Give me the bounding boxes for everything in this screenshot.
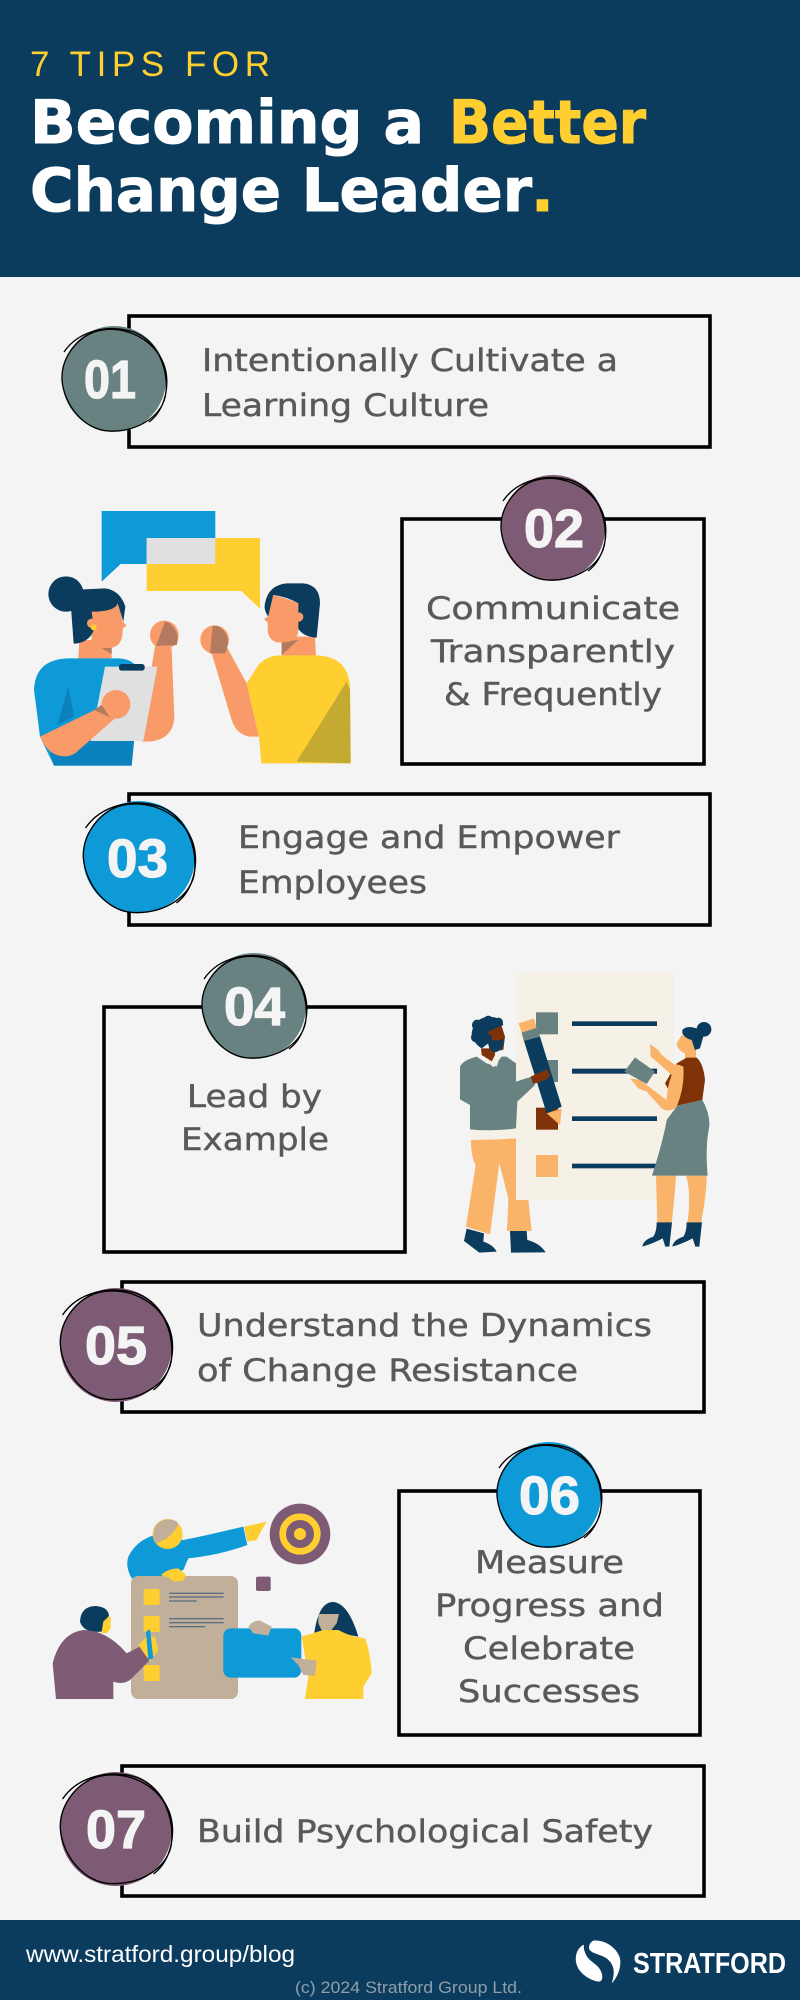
- tip 5 text: [197, 1308, 652, 1389]
- man with pencil: [460, 1016, 562, 1253]
- tip 4 text: Example: [181, 1122, 329, 1158]
- panel: tip 5: [60, 1282, 704, 1412]
- tip 1 text: Learning Culture: [202, 388, 489, 424]
- illustration: team with checklist and target: [53, 1504, 372, 1699]
- tip 3 text: [238, 820, 620, 901]
- tip 1 text: Intentionally Cultivate a: [202, 343, 618, 379]
- tip 2 text: Transparently: [430, 634, 675, 670]
- man pointing over board: [127, 1519, 267, 1578]
- man in yellow shirt: [200, 583, 351, 763]
- badge 07: [60, 1772, 173, 1886]
- panel: tip 4: [104, 953, 405, 1252]
- blog url: www.stratford.group/blog: [25, 1941, 295, 1967]
- tip 1 text: [202, 343, 618, 424]
- badge 04: [202, 953, 307, 1059]
- tip 6 text: Measure: [475, 1545, 624, 1581]
- tip 2 text: Communicate: [426, 591, 680, 627]
- tip 6 text: Progress and: [435, 1588, 664, 1624]
- badge 02: 02: [524, 499, 584, 559]
- woman with book: [624, 1022, 711, 1247]
- tip 6 text: [435, 1545, 664, 1710]
- title: [30, 88, 646, 226]
- panel: tip 6: [399, 1442, 700, 1735]
- badge 07: 07: [86, 1800, 146, 1860]
- panel: tip 1: [62, 316, 710, 447]
- illustration: checklist with two people: [460, 972, 711, 1253]
- badge 06: [497, 1442, 602, 1548]
- tip 4 text: [181, 1079, 329, 1158]
- tip 6 text: Successes: [458, 1674, 640, 1710]
- icon: Stratford logo mark: [576, 1941, 620, 1983]
- badge 04: 04: [224, 977, 285, 1037]
- checklist paper: [516, 972, 674, 1200]
- panel: tip 3: [83, 794, 710, 925]
- checklist board: [131, 1568, 238, 1699]
- badge 01: [62, 326, 167, 432]
- tip 2 text: [426, 591, 680, 713]
- badge 03: 03: [107, 829, 168, 889]
- title: Becoming a: [30, 88, 424, 158]
- eyebrow: 7 tips for: 7 TIPS FOR: [30, 45, 270, 84]
- tip 6 text: Celebrate: [463, 1631, 635, 1667]
- badge 05: [60, 1288, 173, 1402]
- small square: [256, 1577, 271, 1591]
- panel: tip 7: [60, 1766, 704, 1896]
- tip 7 text: Build Psychological Safety: [197, 1814, 653, 1850]
- badge 02: [501, 475, 606, 581]
- badge 05: 05: [85, 1316, 147, 1376]
- tip 4 text: Lead by: [187, 1079, 322, 1115]
- woman with clipboard: [34, 576, 179, 766]
- tip 3 text: Employees: [238, 865, 427, 901]
- tip 2 text: & Frequently: [444, 677, 662, 713]
- speech bubbles: [102, 511, 260, 609]
- tip 3 text: Engage and Empower: [238, 820, 620, 856]
- badge 03: [83, 801, 196, 913]
- woman with tablet: [223, 1602, 372, 1699]
- target: [270, 1504, 330, 1564]
- tip 5 text: Understand the Dynamics: [197, 1308, 652, 1344]
- badge 01: 01: [84, 350, 136, 410]
- copyright: (c) 2024 Stratford Group Ltd.: [295, 1978, 522, 1997]
- person in purple: [53, 1606, 158, 1699]
- title: Better: [449, 88, 646, 158]
- tip 5 text: of Change Resistance: [197, 1353, 578, 1389]
- panel: tip 2: [402, 475, 704, 764]
- title: Change Leader: [30, 156, 532, 226]
- badge 06: 06: [519, 1466, 580, 1526]
- title: .: [531, 156, 554, 226]
- header banner: [0, 0, 800, 277]
- illustration: two people talking: [34, 511, 351, 766]
- footer: [0, 1920, 800, 2000]
